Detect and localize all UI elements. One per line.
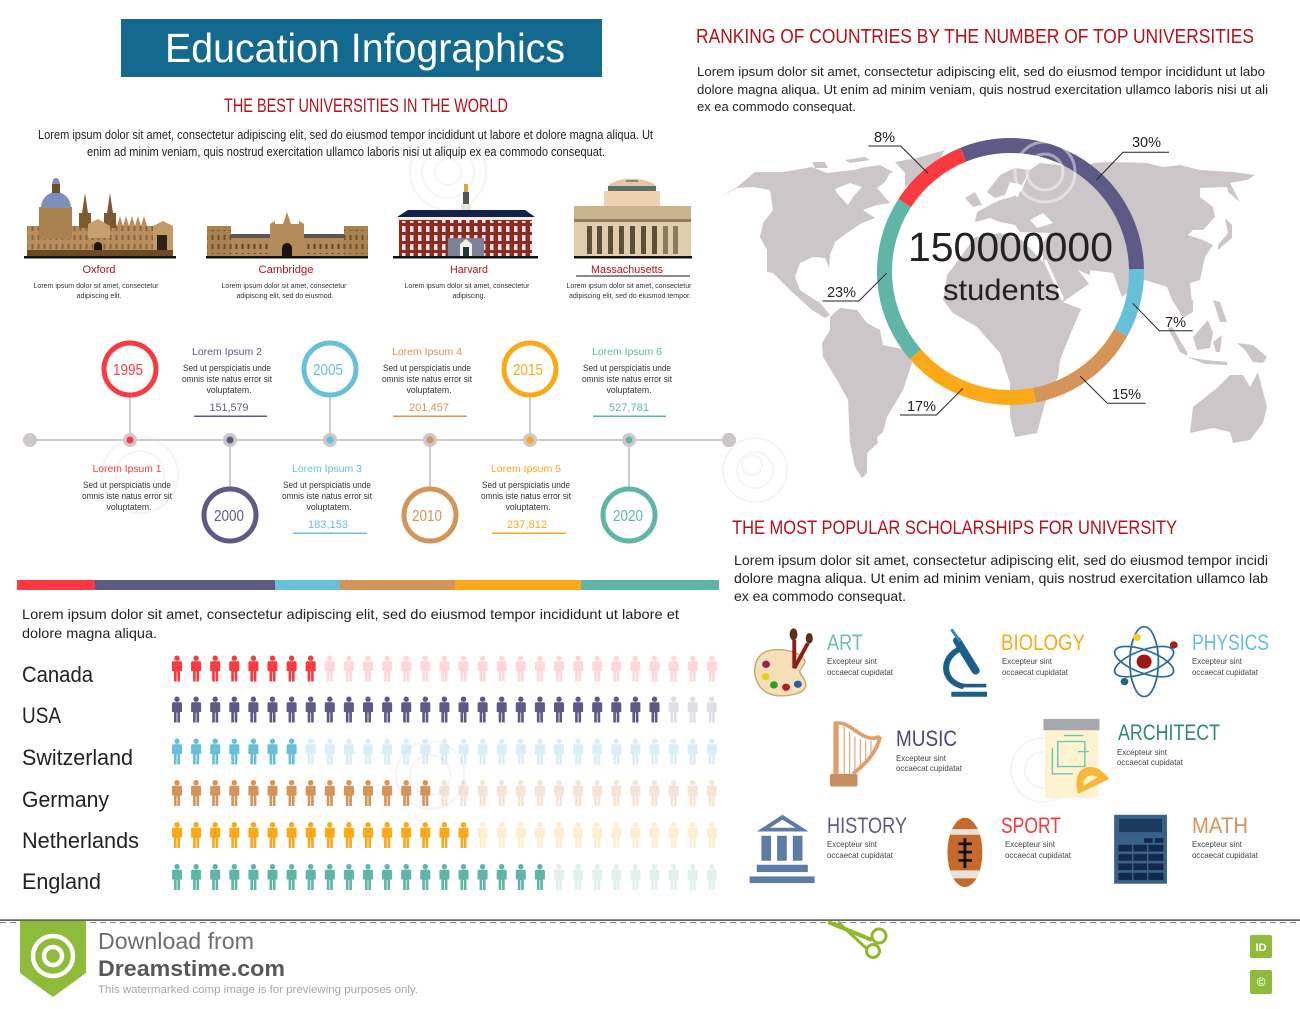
icon: Massachusetts building xyxy=(574,179,692,258)
university: Oxford xyxy=(24,178,176,300)
Lorem Ipsum 6 xyxy=(582,346,672,417)
row: Netherlands: Netherlands xyxy=(22,828,139,853)
year 2005: 2005 xyxy=(313,362,343,379)
label 17%: 17% xyxy=(907,398,936,415)
row: USA xyxy=(23,696,717,723)
subject: sport: occaecat cupidatat xyxy=(1005,850,1072,860)
Lorem Ipsum 6: 527,781 xyxy=(609,402,649,414)
ring chart xyxy=(884,146,1137,398)
label 23%: 23% xyxy=(827,284,856,301)
icon: scissors xyxy=(828,922,886,958)
university: Cambridge xyxy=(206,212,368,300)
Lorem Ipsum 4: Lorem Ipsum 4 xyxy=(392,346,462,358)
Lorem Ipsum 3 xyxy=(282,463,372,534)
subject: biology: occaecat cupidatat xyxy=(1002,667,1069,677)
intro text block: Lorem ipsum dolor sit amet, consectetur adipiscing elit, sed do eiusmod tempor incididunt ut labore et dolore magna aliqua. Ut xyxy=(38,127,653,142)
icon: blueprint and protractor xyxy=(1043,719,1109,798)
year 2020: 2020 xyxy=(613,508,643,525)
icon: calculator xyxy=(1114,815,1167,884)
university: Massachusetts: adipiscing elit, sed do eiusmod tempor. xyxy=(569,291,691,300)
label 17% xyxy=(900,388,963,415)
year 2005 xyxy=(304,343,356,395)
footer watermark strip: This watermarked comp image is for previewing purposes only. xyxy=(98,984,418,996)
university: Cambridge: Lorem ipsum dolor sit amet, consectetur xyxy=(222,281,347,290)
icon: classical building xyxy=(750,815,815,883)
subject: art: occaecat cupidatat xyxy=(827,667,894,677)
Lorem Ipsum 4: 201,457 xyxy=(409,402,449,414)
subject: sport xyxy=(947,813,1072,887)
label 7% xyxy=(1133,303,1193,331)
label 8% xyxy=(868,129,928,173)
badge: ID: ID xyxy=(1256,942,1267,954)
university: Harvard: adipiscing. xyxy=(452,291,486,300)
ranking text block xyxy=(697,64,1268,114)
Lorem Ipsum 1: voluptatem. xyxy=(106,502,152,512)
Lorem Ipsum 2: Sed ut perspiciatis unde xyxy=(183,363,271,373)
subject: architect: Excepteur sint xyxy=(1117,747,1168,757)
intro text block xyxy=(38,127,653,159)
footer watermark strip xyxy=(0,920,1300,997)
footer watermark strip: Dreamstime.com xyxy=(98,956,285,981)
Lorem Ipsum 5: 237,812 xyxy=(507,519,547,531)
row: Canada xyxy=(23,656,717,682)
row: England xyxy=(22,864,720,894)
Lorem Ipsum 2: voluptatem. xyxy=(206,385,252,395)
timeline xyxy=(23,343,736,541)
university: Oxford: Oxford xyxy=(82,264,116,276)
title banner xyxy=(121,19,602,77)
row: USA: USA xyxy=(22,703,61,728)
Lorem Ipsum 1 xyxy=(82,463,172,512)
subject: biology: BIOLOGY xyxy=(1001,630,1085,655)
total students xyxy=(908,224,1113,307)
ranking text block: Lorem ipsum dolor sit amet, consectetur adipiscing elit, sed do eiusmod tempor incididunt ut labo xyxy=(697,64,1265,79)
total students: 150000000 xyxy=(908,224,1113,270)
Lorem Ipsum 4: voluptatem. xyxy=(406,385,452,395)
Lorem Ipsum 4 xyxy=(382,346,472,417)
footer watermark strip: Download from xyxy=(98,928,254,954)
year 2000: 2000 xyxy=(214,508,244,525)
ranking text block: ex ea commodo consequat. xyxy=(697,99,856,114)
subject: music: occaecat cupidatat xyxy=(896,763,963,773)
icon: harp xyxy=(830,722,880,786)
badge: copyright xyxy=(1250,970,1272,994)
university: Massachusetts: Massachusetts xyxy=(591,264,663,276)
world map xyxy=(720,150,1267,478)
subject: history xyxy=(750,813,907,883)
intro text block: enim ad minim veniam, quis nostrud exercitation ullamco laboris nisi ut aliquip ex ea commodo consequat. xyxy=(87,144,605,159)
Lorem Ipsum 5: voluptatem. xyxy=(506,502,550,512)
year 2015 xyxy=(504,343,556,395)
row: Germany xyxy=(22,780,720,812)
row: England: England xyxy=(22,869,101,894)
pictogram intro text xyxy=(22,606,679,641)
icon: Oxford building xyxy=(24,178,176,258)
university: Cambridge: Cambridge xyxy=(258,264,314,276)
scholarships text block: Lorem ipsum dolor sit amet, consectetur adipiscing elit, sed do eiusmod tempor incidi xyxy=(734,552,1268,568)
year 2010 xyxy=(404,489,456,541)
label 30% xyxy=(1096,134,1169,180)
icon: football xyxy=(947,818,982,887)
icon: Cambridge building xyxy=(206,212,368,258)
subject: biology xyxy=(946,629,1085,694)
subject: physics: Excepteur sint xyxy=(1192,656,1243,666)
Lorem Ipsum 6: Sed ut perspiciatis unde xyxy=(583,363,671,373)
scholarships text block: dolore magna aliqua. Ut enim ad minim veniam, quis nostrud exercitation ullamco lab xyxy=(734,570,1268,586)
label 15%: 15% xyxy=(1112,386,1141,403)
logo badge xyxy=(20,921,86,997)
university: Oxford: Lorem ipsum dolor sit amet, consectetur xyxy=(34,281,159,290)
label 30%: 30% xyxy=(1132,134,1161,151)
label 23% xyxy=(822,273,886,301)
Lorem Ipsum 1: omnis iste natus error sit xyxy=(82,491,172,501)
university: Oxford: adipiscing elit. xyxy=(76,291,122,300)
badge: ID xyxy=(1250,935,1272,958)
subject: history: Excepteur sint xyxy=(827,839,878,849)
university: Harvard xyxy=(393,184,538,300)
subject: physics: occaecat cupidatat xyxy=(1192,667,1259,677)
Lorem Ipsum 2 xyxy=(182,346,272,417)
Lorem Ipsum 3: voluptatem. xyxy=(306,502,352,512)
university: Harvard: Lorem ipsum dolor sit amet, consectetur xyxy=(404,281,530,290)
university: Massachusetts: Lorem ipsum dolor sit amet, consectetur xyxy=(566,281,692,290)
Lorem Ipsum 1: Sed ut perspiciatis unde xyxy=(83,480,171,490)
subject: math: Excepteur sint xyxy=(1192,839,1243,849)
Lorem Ipsum 2: Lorem Ipsum 2 xyxy=(192,346,262,358)
subject: sport: Excepteur sint xyxy=(1005,839,1056,849)
year 2000 xyxy=(204,489,256,541)
colour proportion bar xyxy=(17,580,719,590)
Lorem Ipsum 6: voluptatem. xyxy=(606,385,652,395)
icon: microscope xyxy=(946,629,987,694)
title banner: Education Infographics xyxy=(165,25,565,71)
subject: history: HISTORY xyxy=(827,813,907,838)
subject: math: occaecat cupidatat xyxy=(1192,850,1259,860)
Lorem Ipsum 2: omnis iste natus error sit xyxy=(182,374,272,384)
Lorem Ipsum 5: Sed ut perspiciatis unde xyxy=(482,480,570,490)
Lorem Ipsum 5: omnis iste natus error sit xyxy=(481,491,571,501)
subject: physics: PHYSICS xyxy=(1192,630,1269,655)
subject: math xyxy=(1114,813,1259,884)
icon: atom xyxy=(1110,627,1178,697)
university: Harvard: Harvard xyxy=(450,264,488,276)
university: Cambridge: adipiscing elit, sed do eiusmod. xyxy=(236,291,334,300)
university: Massachusetts xyxy=(566,179,692,300)
scholarships text block xyxy=(734,552,1268,604)
Lorem Ipsum 1: Lorem Ipsum 1 xyxy=(92,463,162,475)
Lorem Ipsum 2: 151,579 xyxy=(210,402,248,414)
icon: palette xyxy=(755,628,813,696)
subject: architect: occaecat cupidatat xyxy=(1117,757,1184,767)
heading: best universities: THE BEST UNIVERSITIES IN THE WORLD xyxy=(224,96,508,117)
subject: art: ART xyxy=(827,630,863,655)
Lorem Ipsum 3: omnis iste natus error sit xyxy=(282,491,372,501)
label 8%: 8% xyxy=(874,129,895,146)
year 1995: 1995 xyxy=(113,362,143,379)
Lorem Ipsum 4: omnis iste natus error sit xyxy=(382,374,472,384)
row: Germany: Germany xyxy=(22,787,109,812)
icon: Harvard building xyxy=(393,184,538,258)
Lorem Ipsum 5 xyxy=(481,463,571,534)
Lorem Ipsum 3: 183,153 xyxy=(308,519,348,531)
year 2020 xyxy=(603,489,655,541)
Lorem Ipsum 4: Sed ut perspiciatis unde xyxy=(383,363,471,373)
Lorem Ipsum 3: Sed ut perspiciatis unde xyxy=(283,480,371,490)
scholarships text block: ex ea commodo consequat. xyxy=(734,588,906,604)
subject: art xyxy=(755,628,894,696)
Lorem Ipsum 3: Lorem Ipsum 3 xyxy=(292,463,362,475)
subject: art: Excepteur sint xyxy=(827,656,878,666)
total students: students xyxy=(943,274,1060,307)
subject: sport: SPORT xyxy=(1001,813,1061,838)
subject: music: Excepteur sint xyxy=(896,753,947,763)
ranking text block: dolore magna aliqua. Ut enim ad minim veniam, quis nostrud exercitation ullamco laboris nisi ut ali xyxy=(697,82,1268,97)
year 2010: 2010 xyxy=(412,508,442,525)
pictogram chart: universities by country xyxy=(22,656,720,894)
subject: architect xyxy=(1043,719,1220,798)
subject: math: MATH xyxy=(1192,813,1248,838)
Lorem Ipsum 6: Lorem Ipsum 6 xyxy=(592,346,662,358)
Lorem Ipsum 6: omnis iste natus error sit xyxy=(582,374,672,384)
subject: physics xyxy=(1110,627,1269,697)
subject: history: occaecat cupidatat xyxy=(827,850,894,860)
label 15% xyxy=(1080,376,1146,403)
world map with ring chart xyxy=(720,129,1267,478)
row: Switzerland: Switzerland xyxy=(22,745,133,770)
heading: scholarships: THE MOST POPULAR SCHOLARSHIPS FOR UNIVERSITY xyxy=(732,518,1177,539)
pictogram intro text: dolore magna aliqua. xyxy=(22,625,157,641)
pictogram intro text: Lorem ipsum dolor sit amet, consectetur adipiscing elit, sed do eiusmod tempor incididunt ut labore et xyxy=(22,606,679,622)
row: Netherlands xyxy=(24,822,717,848)
subject: music xyxy=(830,722,963,786)
badge: copyright: © xyxy=(1257,975,1266,989)
year 1995 xyxy=(104,343,156,395)
row: Canada: Canada xyxy=(22,662,94,687)
row: Switzerland xyxy=(23,738,717,765)
subject: architect: ARCHITECT xyxy=(1118,720,1220,745)
label 7%: 7% xyxy=(1165,314,1186,331)
year 2015: 2015 xyxy=(513,362,543,379)
subject: biology: Excepteur sint xyxy=(1002,656,1053,666)
Lorem Ipsum 5: Lorem Ipsum 5 xyxy=(491,463,561,475)
subject: music: MUSIC xyxy=(896,726,957,751)
